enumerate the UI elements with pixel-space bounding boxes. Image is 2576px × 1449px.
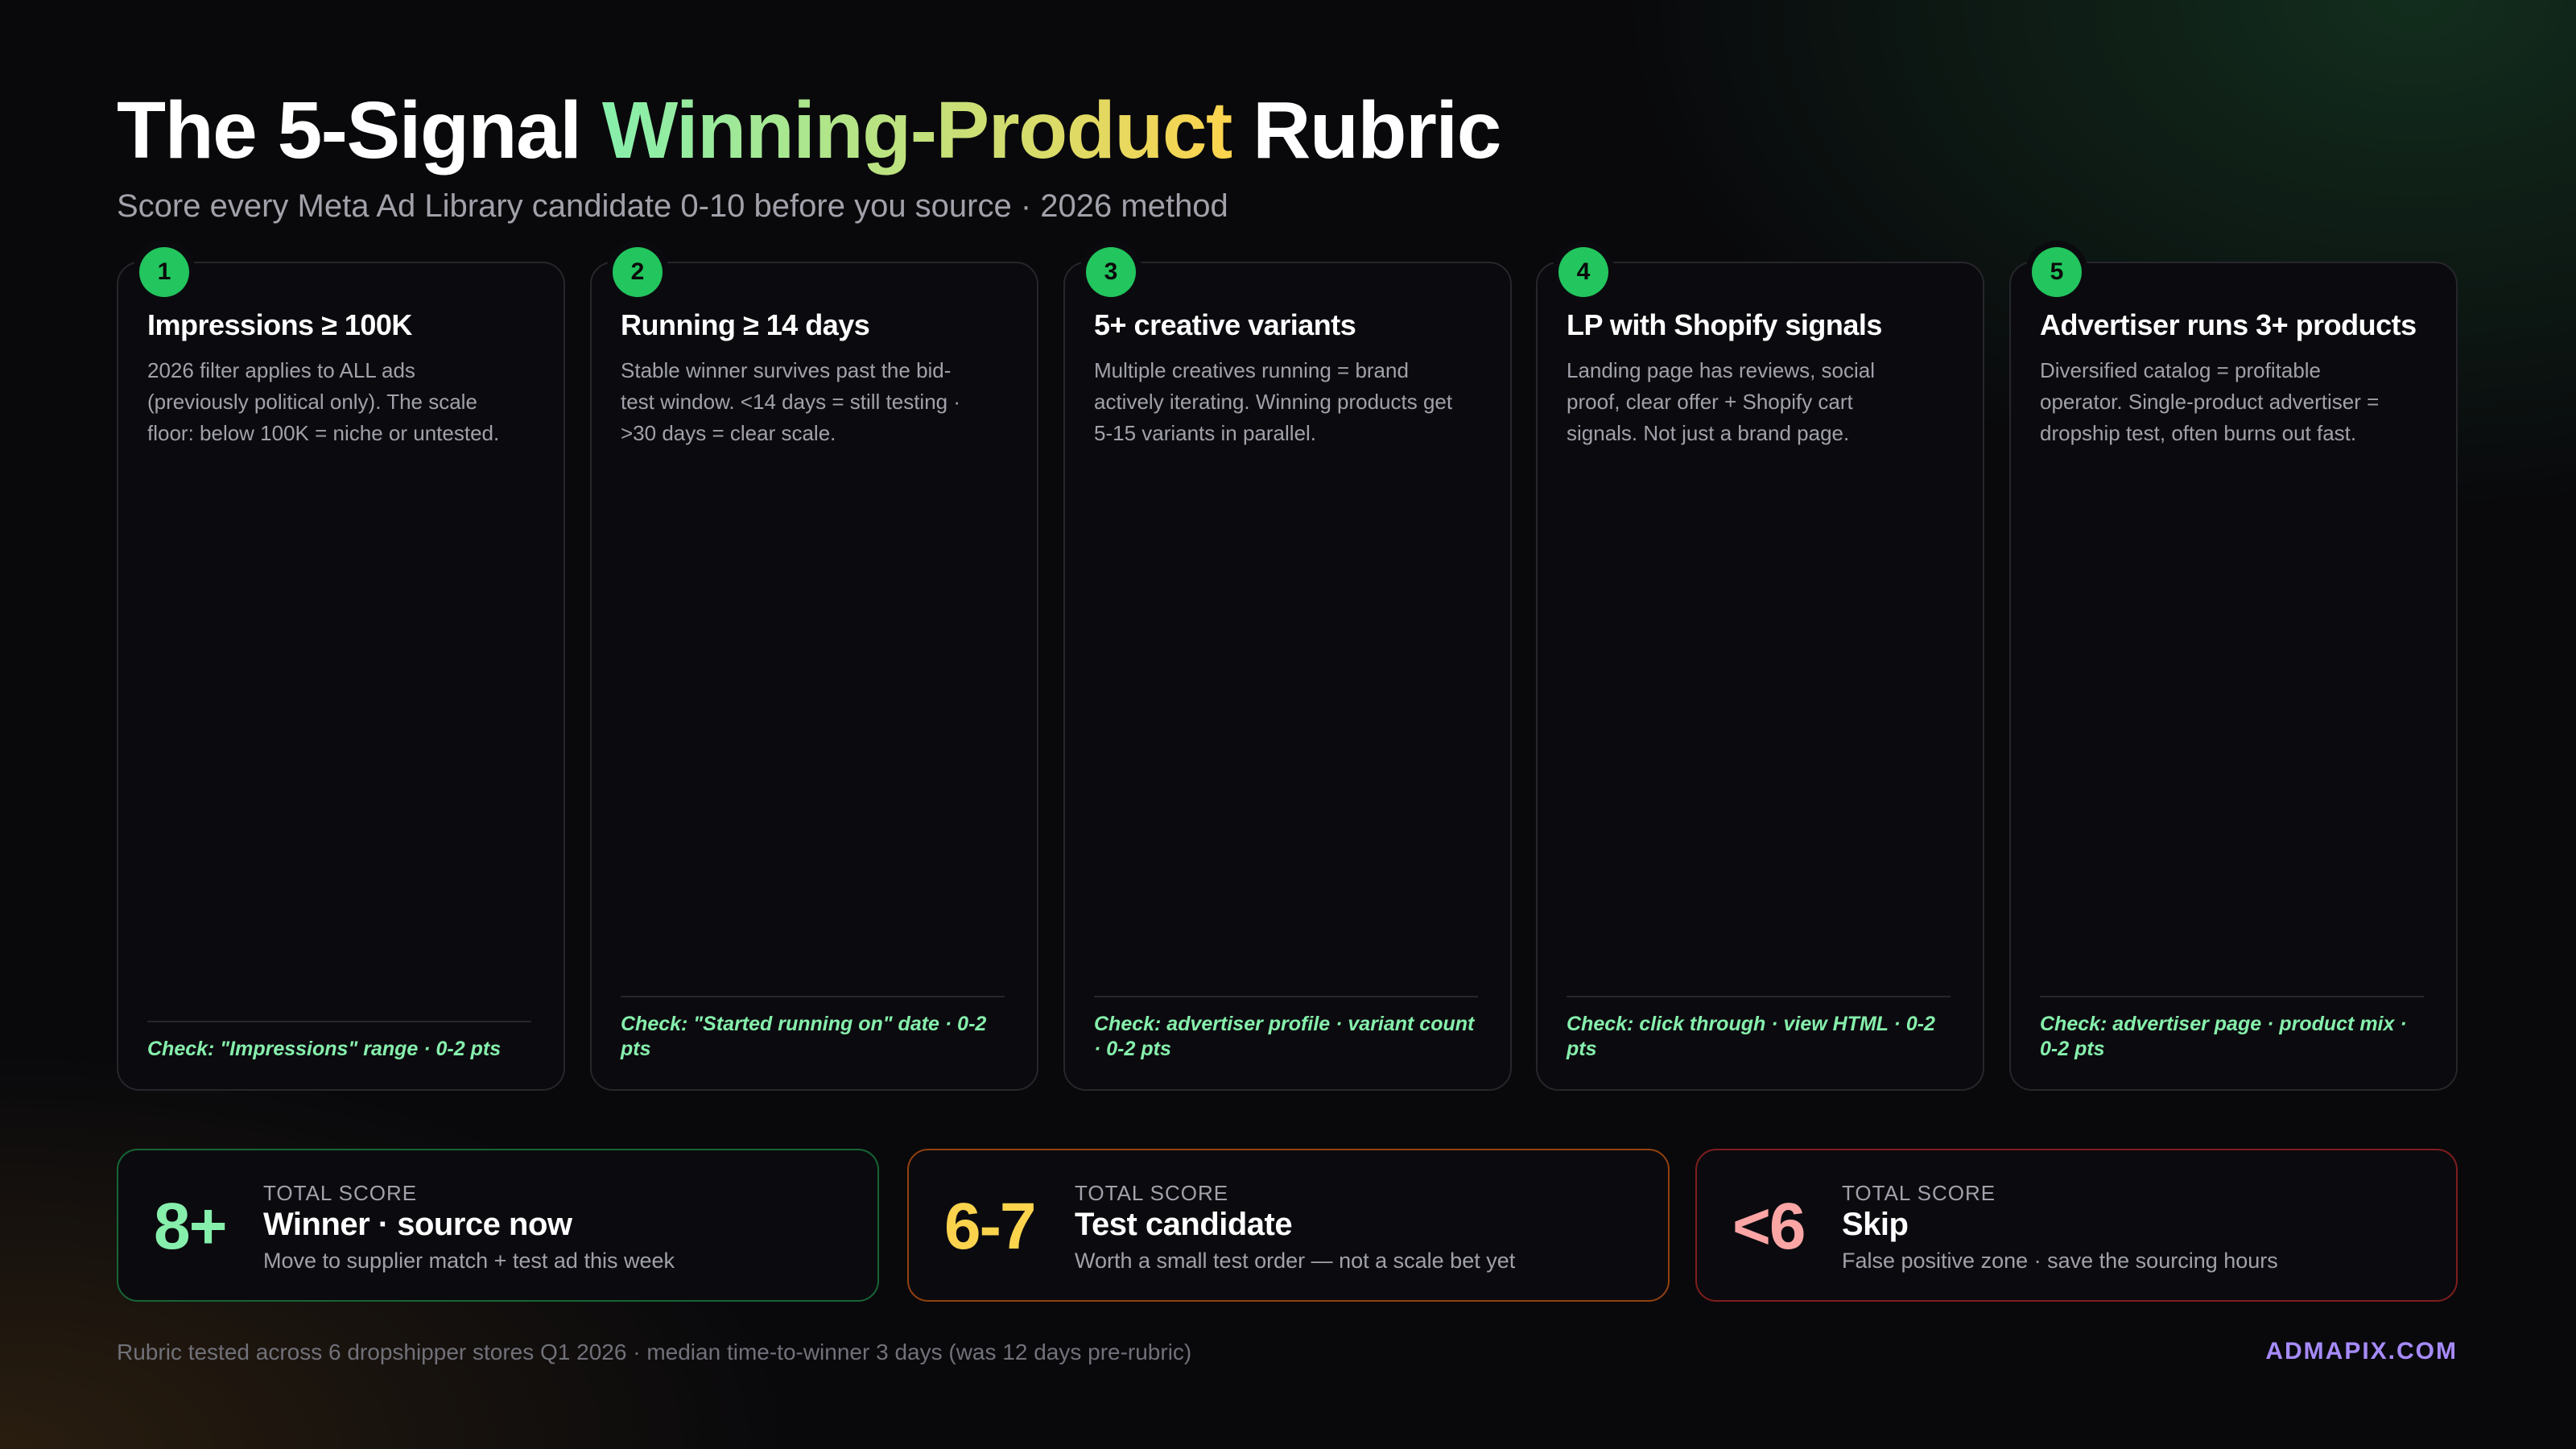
body 3: Multiple creatives running = brand actively iterating. Winning products get 5-15 variants in parallel. <box>1094 358 1452 445</box>
title: The 5-Signal Winning-Product Rubric <box>117 85 1501 175</box>
panel: signal 4 <box>1536 262 1984 1091</box>
badge 4: 4 <box>1577 258 1590 285</box>
number 8+: 8+ <box>154 1190 225 1263</box>
body 1: 2026 filter applies to ALL ads (previously political only). The scale floor: below 100K = niche or untested. <box>147 358 499 445</box>
score box: skip <box>1695 1149 2458 1302</box>
badge 5 <box>2032 247 2082 297</box>
heading 4: LP with Shopify signals <box>1567 308 1882 341</box>
badge 3 <box>1086 247 1136 297</box>
desc winner: Move to supplier match + test ad this week <box>263 1249 675 1273</box>
badge 2 <box>613 247 663 297</box>
check 3: Check: advertiser profile · variant count · 0-2 pts <box>1094 1013 1474 1060</box>
badge 1 <box>139 247 189 297</box>
body 5: Diversified catalog = profitable operator. Single-product advertiser = dropship test, often burns out fast. <box>2040 358 2379 445</box>
panel: signal 2 <box>590 262 1038 1091</box>
body 4: Landing page has reviews, social proof, clear offer + Shopify cart signals. Not just a brand page. <box>1567 358 1875 445</box>
heading 3: 5+ creative variants <box>1094 308 1356 341</box>
panel: signal 5 <box>2009 262 2458 1091</box>
badge 4 <box>1558 247 1608 297</box>
check 5 <box>2040 996 2424 1062</box>
heading skip: Skip <box>1842 1207 1908 1242</box>
heading 5: Advertiser runs 3+ products <box>2040 308 2417 341</box>
badge 2: 2 <box>631 258 644 285</box>
check 1: Check: "Impressions" range · 0-2 pts <box>147 1038 501 1060</box>
panel: signal 3 <box>1063 262 1512 1091</box>
check 1 <box>147 1021 531 1062</box>
check 4 <box>1567 996 1951 1062</box>
desc test: Worth a small test order — not a scale bet yet <box>1075 1249 1515 1273</box>
heading 2: Running ≥ 14 days <box>621 308 869 341</box>
label winner: TOTAL SCORE <box>263 1181 417 1205</box>
label test: TOTAL SCORE <box>1075 1181 1228 1205</box>
check 2: Check: "Started running on" date · 0-2 pts <box>621 1013 986 1060</box>
heading test: Test candidate <box>1075 1207 1292 1242</box>
check 5: Check: advertiser page · product mix · 0-2 pts <box>2040 1013 2407 1060</box>
number <6: <6 <box>1732 1190 1805 1263</box>
desc skip: False positive zone · save the sourcing hours <box>1842 1249 2278 1273</box>
badge 3: 3 <box>1104 258 1117 285</box>
brand: ADMAPIX.COM <box>2265 1338 2458 1364</box>
number 6-7: 6-7 <box>944 1190 1035 1263</box>
score box: test <box>907 1149 1670 1302</box>
footer note: Rubric tested across 6 dropshipper stores Q1 2026 · median time-to-winner 3 days (was 12 days pre-rubric) <box>117 1340 1191 1364</box>
badge 5: 5 <box>2050 258 2063 285</box>
heading 1: Impressions ≥ 100K <box>147 308 412 341</box>
heading winner: Winner · source now <box>263 1207 572 1242</box>
check 2 <box>621 996 1005 1062</box>
label skip: TOTAL SCORE <box>1842 1181 1996 1205</box>
badge 1: 1 <box>158 258 171 285</box>
subtitle: Score every Meta Ad Library candidate 0-10 before you source · 2026 method <box>117 188 1228 224</box>
panel: signal 1 <box>117 262 565 1091</box>
check 4: Check: click through · view HTML · 0-2 pts <box>1567 1013 1935 1060</box>
body 2: Stable winner survives past the bid-test window. <14 days = still testing · >30 days = clear scale. <box>621 358 960 445</box>
score box: winner <box>117 1149 879 1302</box>
